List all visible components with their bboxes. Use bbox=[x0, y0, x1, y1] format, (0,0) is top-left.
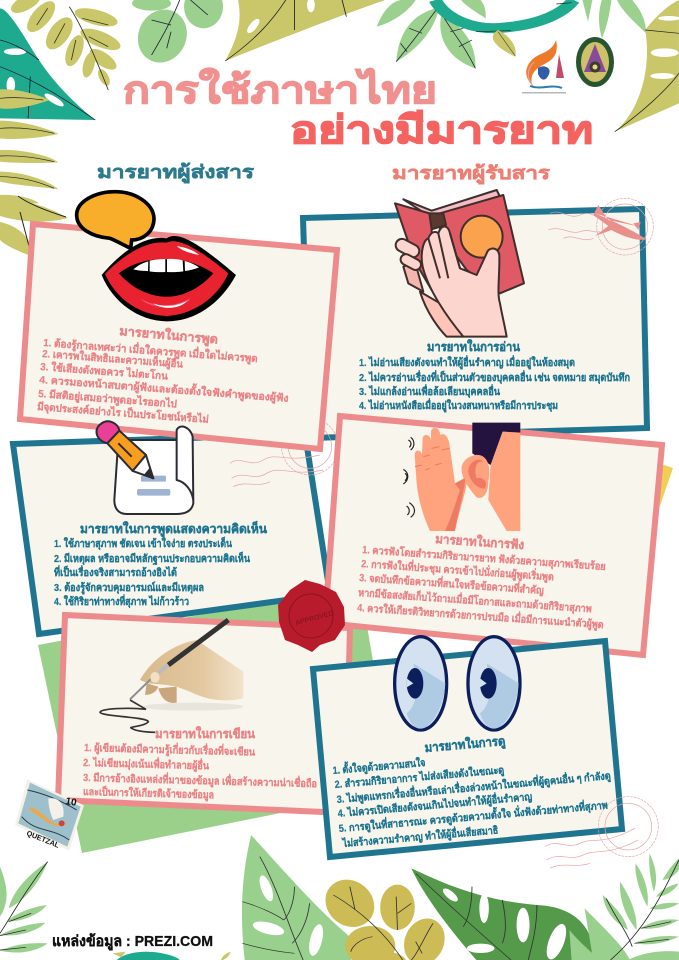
viewing list: 3. ไม่พูดแทรกเรื่องอื่นหรือเล่าเรื่องล่วงหน้าในขณะที่ผู้ดูคนอื่น ๆ กำลังดู bbox=[336, 768, 612, 807]
opinions list: 1. ใช้ภาษาสุภาพ ชัดเจน เข้าใจง่าย ตรงประเด็น bbox=[54, 536, 233, 551]
bottom leaves decoration bbox=[0, 835, 679, 960]
speaking list: 2. เคารพในสิทธิและความเห็นผู้อื่น bbox=[42, 346, 184, 372]
speaking list: 4. ควรมองหน้าสบตาผู้ฟังและต้องตั้งใจฟังคำพูดของผู้ฟัง bbox=[39, 371, 289, 406]
opinions list bbox=[54, 536, 251, 609]
heading: receiver manners: มารยาทผู้รับสาร bbox=[392, 163, 550, 185]
viewing list: ไม่สร้างความรำคาญ ทำให้ผู้อื่นเสียสมาธิ bbox=[341, 822, 499, 851]
reading list bbox=[359, 355, 630, 413]
writing list: และเป็นการให้เกียรติเจ้าของข้อมูล bbox=[83, 784, 214, 802]
panel: expressing opinions bbox=[13, 418, 338, 634]
logo: university emblem with flame bbox=[522, 40, 566, 94]
source credit: แหล่งข้อมูล : PREZI.COM bbox=[52, 933, 213, 951]
heading: listening: มารยาทในการฟัง bbox=[435, 531, 525, 552]
speaking list: 1. ต้องรู้กาลเทศะว่า เมื่อใดควรพูด เมื่อใดไม่ควรพูด bbox=[43, 335, 258, 366]
icon: eyes bbox=[395, 637, 520, 730]
viewing list: 5. การดูในที่สาธารณะ ควรดูด้วยความตั้งใจ นั่งฟังด้วยท่าทางที่สุภาพ bbox=[338, 797, 608, 836]
viewing list: 1. ตั้งใจดูด้วยความสนใจ bbox=[332, 754, 426, 778]
heading: writing: มารยาทในการเขียน bbox=[155, 726, 255, 741]
viewing list bbox=[332, 754, 612, 851]
opinions list: 3. ต้องรู้จักควบคุมอารมณ์และมีเหตุผล bbox=[54, 581, 204, 595]
logo: university seal bbox=[576, 37, 614, 87]
postmark bbox=[545, 797, 658, 868]
postmark bbox=[230, 418, 338, 487]
writing list: 1. ผู้เขียนต้องมีความรู้เกี่ยวกับเรื่องที่จะเขียน bbox=[84, 740, 256, 759]
heading: opinions: มารยาทในการพูดแสดงความคิดเห็น bbox=[80, 521, 267, 537]
listening list: 3. จดบันทึกข้อความที่สนใจหรือข้อความที่สำคัญ bbox=[359, 570, 544, 597]
listening list bbox=[357, 543, 606, 632]
reading list: 1. ไม่อ่านเสียงดังจนทำให้ผู้อื่นรำคาญ เมื่ออยู่ในห้องสมุด bbox=[359, 355, 575, 370]
viewing list: 2. สำรวมกิริยาอาการ ไม่ส่งเสียงดังในขณะดู bbox=[334, 763, 505, 792]
viewing list: 4. ไม่ควรเปิดเสียงดังจนเกินไปจนทำให้ผู้อื่นรำคาญ bbox=[337, 789, 533, 821]
opinions list: 2. มีเหตุผล หรืออาจมีหลักฐานประกอบความคิดเห็น bbox=[54, 551, 251, 566]
left lower frond bbox=[0, 196, 68, 258]
listening list: 4. ควรให้เกียรติวิทยากรด้วยการปรบมือ เมื่อมีการแนะนำตัวผู้พูด bbox=[357, 600, 604, 632]
top leaves decoration bbox=[0, 0, 679, 203]
panel: speaking bbox=[20, 192, 337, 449]
postage stamp: quetzal: 10 bbox=[64, 796, 78, 809]
icon: hand cupping ear bbox=[403, 423, 520, 531]
speaking list: มีจุดประสงค์อย่างไร เป็นประโยชน์หรือไม่ bbox=[37, 399, 209, 427]
heading: speaking: มารยาทในการพูด bbox=[119, 323, 219, 348]
postage stamp: quetzal bbox=[15, 779, 84, 851]
panel: listening bbox=[325, 416, 662, 655]
title: การใช้ภาษาไทย bbox=[123, 68, 437, 112]
reading list: 3. ไม่แกล้งอ่านเพื่อล้อเลียนบุคคลอื่น bbox=[359, 384, 501, 399]
wax seal bbox=[278, 580, 345, 652]
opinions list: ที่เป็นเรื่องจริงสามารถอ้างอิงได้ bbox=[54, 565, 177, 579]
reading list: 2. ไม่ควรอ่านเรื่องที่เป็นส่วนตัวของบุคคลอื่น เช่น จดหมาย สมุดบันทึก bbox=[359, 370, 630, 385]
heading: sender manners: มารยาทผู้ส่งสาร bbox=[97, 162, 254, 184]
heading: viewing: มารยาทในการดู bbox=[424, 733, 506, 756]
title: อย่างมีมารยาท bbox=[290, 110, 593, 152]
icon: speech bubble and lips bbox=[77, 192, 236, 321]
listening list: 2. การฟังในที่ประชุม ควรเข้าไปนั่งก่อนผู้พูดเริ่มพูด bbox=[361, 556, 555, 584]
green backing sheet bbox=[38, 585, 395, 853]
reading list: 4. ไม่อ่านหนังสือเมื่ออยู่ในวงสนทนาหรือมีการประชุม bbox=[359, 398, 558, 413]
writing list bbox=[83, 740, 317, 802]
panel: viewing bbox=[313, 637, 658, 868]
writing list: 3. มีการอ้างอิงแหล่งที่มาของข้อมูล เพื่อสร้างความน่าเชื่อถือ bbox=[83, 770, 317, 791]
title bbox=[123, 68, 593, 152]
wax seal: APPROVED bbox=[295, 610, 334, 627]
icon: pencil and paper bbox=[96, 421, 193, 514]
heading: reading: มารยาทในการอ่าน bbox=[427, 339, 520, 354]
icon: hand holding book bbox=[393, 190, 524, 337]
speaking list bbox=[37, 335, 289, 427]
speaking list: 3. ใช้เสียงดังพอควร ไม่ตะโกน bbox=[40, 360, 169, 383]
panel: writing bbox=[58, 615, 350, 813]
listening list: 1. ควรฟังโดยสำรวมกิริยามารยาท ฟังด้วยความสุภาพเรียบร้อย bbox=[362, 543, 606, 574]
panel: reading bbox=[303, 190, 653, 438]
writing list: 2. ไม่เขียนมุ่งเน้นเพื่อทำลายผู้อื่น bbox=[83, 755, 210, 773]
listening list: หากมีข้อสงสัยเก็บไว้ถามเมื่อมีโอกาสและถามด้วยกิริยาสุภาพ bbox=[358, 585, 592, 616]
icon: hand writing with pen bbox=[100, 620, 243, 732]
postage stamp: quetzal: QUETZAL bbox=[25, 828, 61, 850]
speaking list: 5. มีสติอยู่เสมอว่าพูดอะไรออกไป bbox=[38, 387, 178, 411]
yellow backing sheet bbox=[540, 430, 673, 535]
opinions list: 4. ใช้กิริยาท่าทางที่สุภาพ ไม่ก้าวร้าว bbox=[54, 594, 189, 609]
postmark: airplane bbox=[548, 198, 653, 255]
